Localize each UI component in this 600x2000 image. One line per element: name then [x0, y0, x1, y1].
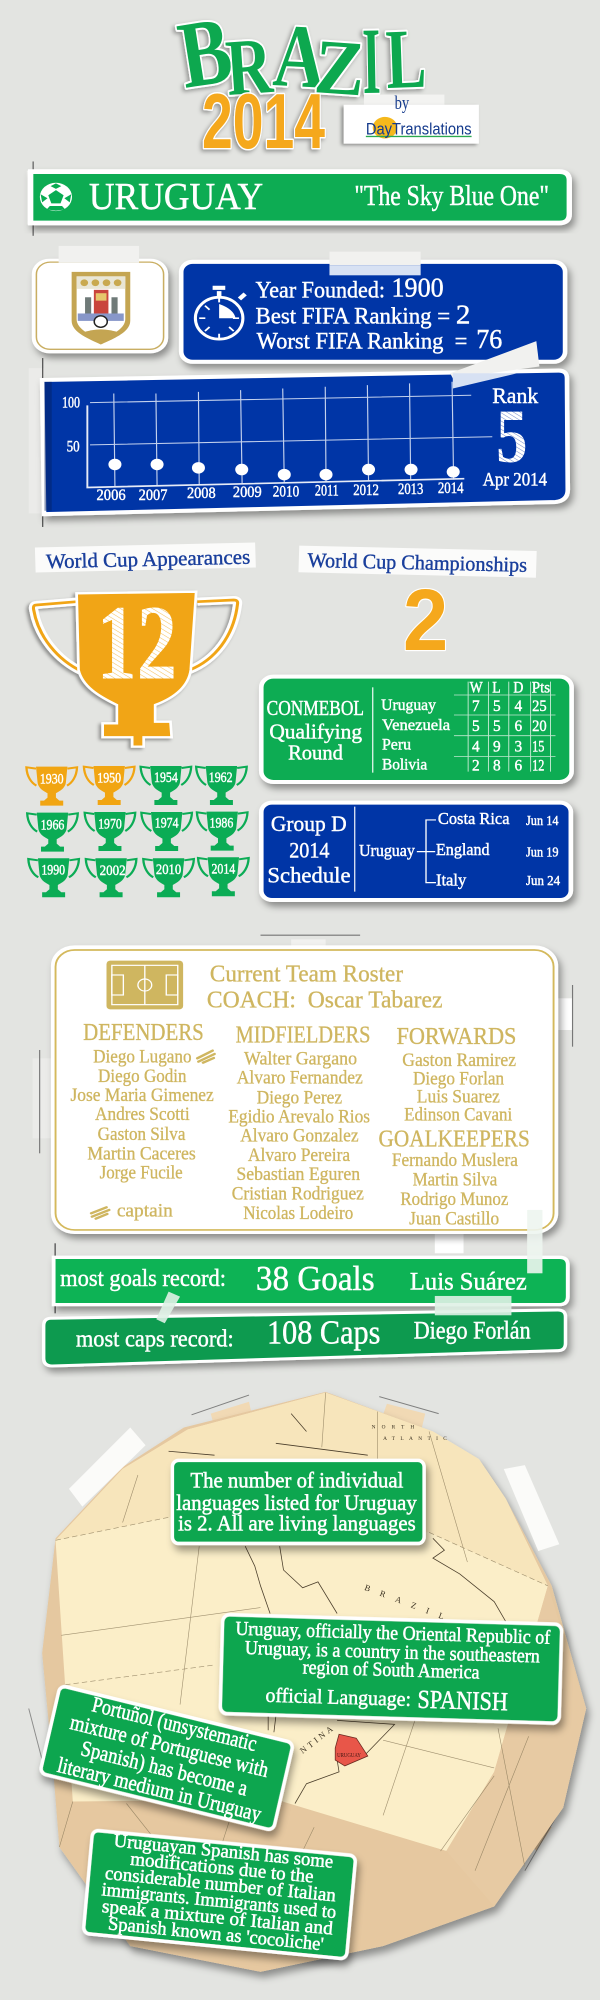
world cup section — [26, 542, 572, 900]
tape — [450, 341, 539, 388]
country names: Peru — [382, 735, 411, 753]
axis labels: 2006 — [97, 486, 126, 504]
axis labels: 2009 — [233, 483, 262, 501]
callout: Portunol: literary medium in Uruguay — [55, 1753, 264, 1826]
qualifying table: 9 — [493, 738, 501, 755]
icon: stopwatch — [195, 288, 245, 339]
column: midfielders: Cristian Rodriguez — [232, 1182, 364, 1204]
map section — [29, 1392, 586, 1972]
fixtures: Jun 19 — [526, 845, 559, 860]
column: midfielders: Sebastian Eguren — [236, 1162, 361, 1185]
axis labels: 2012 — [353, 481, 379, 499]
column: defenders — [70, 1019, 214, 1183]
title: Brazil: I — [362, 8, 381, 114]
column: goalkeepers — [379, 1125, 530, 1229]
callout: Portunol: Spanish) has become a — [79, 1736, 250, 1801]
year founded — [256, 273, 444, 303]
tape: top right — [504, 1465, 559, 1551]
trophies: tournament years: 1986 — [210, 816, 233, 831]
callout: Uruguayan Spanish: Uruguayan Spanish has some — [113, 1830, 334, 1873]
chart dots — [108, 459, 460, 480]
callout: Uruguayan Spanish: considerable number of Italian — [104, 1863, 337, 1907]
column: defenders: Jose Maria Gimenez — [70, 1083, 214, 1106]
qualifying table: 5 — [472, 717, 480, 735]
column: midfielders: Nicolas Lodeiro — [243, 1201, 353, 1224]
title: 2014: 2014 — [202, 77, 325, 165]
callout: official language: official Language: — [265, 1684, 411, 1711]
trophies: tournament years: 2014 — [211, 861, 235, 877]
panel title — [267, 696, 364, 764]
column: goalkeepers: Juan Castillo — [409, 1207, 499, 1229]
map labels: ATLANTIC — [383, 1436, 452, 1442]
roster section — [33, 935, 573, 1366]
map labels: NORTH — [372, 1424, 420, 1430]
logo card — [344, 105, 479, 144]
column: forwards: Gaston Ramirez — [402, 1048, 516, 1071]
crest card — [33, 246, 167, 352]
Uruguay highlight — [335, 1734, 368, 1766]
column: forwards: Edinson Cavani — [404, 1103, 512, 1125]
column: defenders: DEFENDERS — [83, 1019, 204, 1046]
title: Brazil: R — [223, 22, 276, 113]
panel: ranking chart — [29, 341, 568, 527]
panel title: Qualifying — [269, 720, 362, 743]
panel: club facts — [181, 252, 565, 362]
qualifying table: 12 — [532, 757, 544, 774]
map: globe of South America — [42, 1392, 586, 1972]
tape strips — [156, 1210, 542, 1323]
icon: soccer ball — [40, 183, 72, 211]
axis labels: 100 — [62, 394, 80, 411]
fixtures: Italy — [436, 871, 466, 889]
column: defenders: Diego Lugano — [93, 1045, 192, 1067]
axis labels: 2010 — [273, 483, 299, 500]
axis labels: 2014 — [438, 479, 464, 497]
column: midfielders: Alvaro Fernandez — [237, 1066, 363, 1088]
column: defenders: Andres Scotti — [95, 1102, 190, 1125]
axis labels: 50 — [67, 438, 80, 455]
qualifying table: 4 — [515, 697, 522, 715]
callout: Uruguayan Spanish: speak a mixture of Italian and — [101, 1896, 334, 1940]
trophies: tournament years: 1990 — [41, 862, 65, 878]
record: most goals: 38 Goals — [256, 1260, 375, 1298]
fixtures: Uruguay — [359, 841, 415, 860]
trophies: tournament years: 1966 — [41, 817, 64, 833]
trophies: tournament years: 2002 — [100, 863, 126, 879]
qualifying table: W — [470, 679, 483, 696]
tape: top left — [69, 1427, 146, 1507]
fixtures — [359, 809, 560, 889]
record: most caps: Diego Forlán — [414, 1316, 531, 1344]
title: Brazil — [172, 0, 428, 114]
trophies: tournament years: 1974 — [155, 816, 179, 831]
fixtures: Jun 24 — [526, 874, 560, 889]
qualifying table — [454, 679, 555, 774]
qualifying table: 7 — [472, 697, 480, 715]
country names — [381, 696, 450, 773]
country names: Uruguay — [381, 696, 436, 714]
column: midfielders: Diego Perez — [257, 1086, 342, 1108]
title: Brazil: A — [271, 6, 328, 108]
qualifying table: 4 — [472, 738, 480, 755]
column: forwards: Luis Suarez — [417, 1085, 500, 1107]
panel: team roster — [33, 935, 573, 1253]
callout: Uruguayan Spanish: Spanish known as 'cocoliche' — [107, 1913, 325, 1955]
axis labels: 2011 — [315, 482, 339, 499]
qualifying table: Pts — [532, 679, 550, 696]
trophies: tournament years: 1950 — [97, 771, 121, 786]
fixtures: England — [436, 840, 490, 859]
schedule title: Schedule — [267, 863, 351, 888]
callout: Portunol: Portuñol (unsystematic — [90, 1692, 259, 1756]
title: Brazil: L — [384, 12, 428, 107]
callout: official language: region of South America — [302, 1657, 480, 1684]
trophies: tournament years: 1962 — [209, 770, 233, 786]
qualifying table: 5 — [493, 697, 501, 715]
coach: COACH: Oscar Tabarez — [207, 986, 442, 1013]
callout: official language: Uruguay, officially the Oriental Republic of — [235, 1618, 551, 1649]
icon: Uruguay crest — [72, 272, 130, 345]
column: forwards — [397, 1023, 516, 1125]
column: midfielders: Alvaro Pereira — [248, 1143, 350, 1166]
tape — [59, 246, 139, 263]
callout: official language: SPANISH — [417, 1684, 508, 1716]
logo card: DayTranslations — [366, 119, 472, 138]
fixtures: Jun 14 — [526, 814, 559, 829]
column: midfielders: Walter Gargano — [244, 1047, 357, 1069]
map labels — [298, 1424, 456, 1756]
rank label: Rank — [492, 384, 538, 409]
callout: Portunol: mixture of Portuguese with — [68, 1710, 271, 1782]
year founded: Year Founded: — [256, 278, 385, 303]
qualifying table: 5 — [493, 717, 501, 735]
record: most goals — [54, 1243, 568, 1313]
best ranking: Best FIFA Ranking = — [256, 304, 450, 329]
trophies: tournament years — [26, 766, 249, 897]
panel: CONMEBOL qualifying — [261, 677, 572, 782]
column: goalkeepers: Martin Silva — [413, 1168, 497, 1190]
column: goalkeepers: GOALKEEPERS — [379, 1125, 530, 1152]
trophies: tournament years: 1970 — [98, 816, 122, 832]
tape tabs — [29, 1395, 564, 1871]
callout: number of languages: is 2. All are living languages — [178, 1511, 416, 1535]
callout: Portunol — [40, 1684, 294, 1831]
schedule title: Group D — [271, 811, 347, 837]
trophies: tournament years: 1954 — [154, 770, 178, 786]
worst ranking: Worst FIFA Ranking = — [257, 329, 467, 354]
qualifying table: 3 — [515, 738, 522, 755]
qualifying table: 8 — [493, 757, 501, 774]
team name: URUGUAY — [89, 175, 263, 217]
qualifying table: D — [513, 679, 523, 696]
panel title: CONMEBOL — [267, 696, 364, 720]
callout: official language — [220, 1615, 562, 1723]
trophies: tournament years: 1930 — [40, 772, 64, 787]
record: most caps: 108 Caps — [267, 1314, 380, 1351]
banner: Uruguay — [27, 161, 569, 236]
axis labels: 2008 — [187, 484, 216, 502]
callout: number of languages: The number of individual — [190, 1468, 403, 1493]
best ranking: 2 — [456, 300, 470, 330]
heading: World Cup Appearances: World Cup Appearances — [46, 545, 250, 573]
icon: football pitch — [107, 961, 183, 1009]
trophies: tournament years: 2010 — [156, 862, 181, 878]
captain legend — [91, 1199, 173, 1221]
country names: Bolivia — [382, 755, 427, 773]
column: defenders: Martin Caceres — [87, 1142, 196, 1164]
trophy: appearances — [33, 592, 238, 747]
byline tape — [364, 95, 444, 113]
column: defenders: Diego Godin — [98, 1064, 187, 1087]
icon: captain mark — [197, 1051, 215, 1063]
tape — [329, 252, 421, 275]
record: most caps: most caps record: — [76, 1325, 234, 1352]
column: midfielders — [228, 1021, 370, 1224]
callout: number of languages: languages listed for Uruguay — [176, 1491, 417, 1515]
by label: by — [395, 93, 410, 113]
rank date: Apr 2014 — [483, 470, 547, 490]
qualifying table: 25 — [532, 697, 547, 715]
column: defenders: Gaston Silva — [98, 1122, 185, 1145]
column: midfielders: Egidio Arevalo Rios — [228, 1105, 370, 1127]
bracket — [417, 820, 436, 883]
fixtures: Costa Rica — [438, 809, 510, 828]
record: most caps — [44, 1310, 565, 1366]
worst ranking: 76 — [476, 325, 502, 354]
callout: Uruguayan Spanish — [83, 1828, 356, 1959]
column: goalkeepers: Rodrigo Munoz — [400, 1187, 508, 1210]
panel: group schedule — [261, 803, 571, 900]
axis labels: 2013 — [398, 480, 423, 498]
country names: Venezuela — [382, 716, 450, 734]
record: most goals: most goals record: — [60, 1265, 226, 1292]
column: midfielders: Alvaro Gonzalez — [240, 1124, 359, 1146]
qualifying table: 15 — [532, 738, 544, 755]
Uruguay highlight: URUGUAY — [337, 1752, 361, 1759]
qualifying table: 2 — [472, 757, 480, 774]
qualifying table: 6 — [515, 717, 522, 735]
callout: Uruguayan Spanish: modifications due to the — [129, 1849, 314, 1888]
axis labels: 2007 — [139, 486, 167, 504]
captain legend: captain — [117, 1199, 173, 1221]
header and team section — [27, 93, 569, 527]
schedule title: 2014 — [289, 838, 329, 863]
callout: official language: Uruguay, is a country in the southeastern — [245, 1638, 540, 1668]
qualifying table: 20 — [532, 717, 547, 735]
title: Brazil: Z — [312, 22, 368, 112]
axis labels — [62, 394, 464, 504]
panel title: Round — [288, 741, 343, 764]
qualifying table: L — [492, 679, 501, 696]
column: forwards: Diego Forlan — [413, 1067, 505, 1089]
callout: number of languages — [172, 1460, 424, 1543]
line chart grid — [87, 382, 492, 487]
schedule title — [267, 811, 351, 888]
column: defenders: Jorge Fucile — [100, 1161, 183, 1183]
map labels: BRAZIL — [363, 1582, 456, 1625]
column: goalkeepers: Fernando Muslera — [392, 1148, 518, 1171]
qualifying table: 6 — [515, 757, 522, 774]
column: midfielders: MIDFIELDERS — [236, 1021, 370, 1048]
championships value: 2 — [403, 571, 448, 669]
map labels: NTINA — [298, 1722, 337, 1756]
rank value: 5 — [496, 395, 528, 479]
column: forwards: FORWARDS — [397, 1023, 516, 1050]
year founded: 1900 — [392, 273, 444, 303]
roster title: Current Team Roster — [210, 960, 403, 987]
callout: Uruguayan Spanish: immigrants. Immigrants used to — [101, 1879, 337, 1923]
heading: World Cup Championships: World Cup Championships — [307, 548, 527, 576]
record: most goals: Luis Suárez — [410, 1267, 527, 1295]
trophy value: 12 — [97, 584, 177, 702]
